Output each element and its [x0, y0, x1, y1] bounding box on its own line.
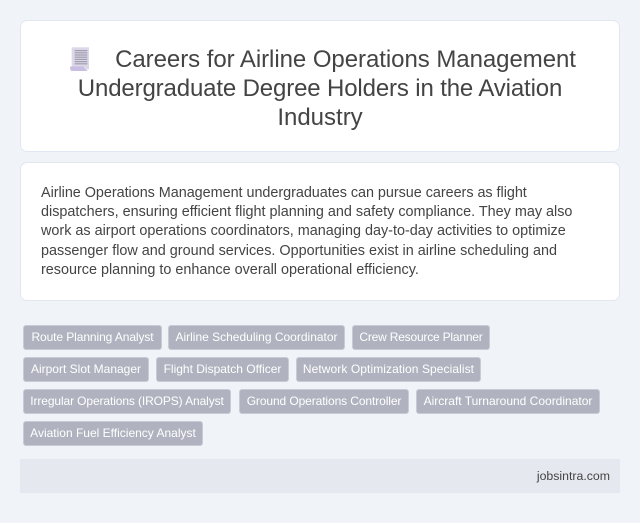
title: Industry	[277, 104, 363, 130]
description text	[41, 185, 572, 278]
tag: Airport Slot Manager	[31, 362, 141, 376]
tag	[168, 325, 345, 350]
title	[78, 46, 576, 130]
description text: work as airport operations coordinators, managing day-to-day activities to optimize	[41, 223, 566, 239]
title: Undergraduate Degree Holders in the Aviation	[78, 74, 562, 102]
tag	[239, 389, 409, 414]
panel: description card	[20, 162, 620, 301]
footer text: jobsintra.com	[537, 469, 610, 483]
tag	[156, 357, 289, 382]
description text: resource planning to enhance overall operational efficiency.	[41, 262, 419, 278]
description text: passenger flow and ground services. Opportunities exist in airline scheduling and	[41, 243, 557, 259]
title: Careers for Airline Operations Management	[115, 46, 576, 72]
footer bar	[20, 459, 620, 493]
tag: Flight Dispatch Officer	[164, 362, 281, 376]
description text: dispatchers, ensuring efficient flight planning and safety compliance. They may also	[41, 204, 572, 220]
panel: title card	[20, 20, 620, 152]
tag: Aviation Fuel Efficiency Analyst	[30, 426, 196, 440]
tag	[352, 325, 490, 350]
tag: Route Planning Analyst	[31, 330, 154, 344]
description text: Airline Operations Management undergraduates can pursue careers as flight	[41, 185, 527, 201]
tag	[23, 389, 231, 414]
tag: Irregular Operations (IROPS) Analyst	[30, 394, 224, 408]
tag: Ground Operations Controller	[247, 394, 401, 408]
tag	[416, 389, 600, 414]
tag	[296, 357, 481, 382]
panel: career tags	[23, 325, 600, 446]
tag	[23, 325, 162, 350]
icon: document scroll	[70, 47, 89, 71]
tag	[23, 357, 149, 382]
tag	[23, 421, 203, 446]
tag: Crew Resource Planner	[359, 330, 483, 344]
tag: Airline Scheduling Coordinator	[175, 330, 338, 344]
tag: Aircraft Turnaround Coordinator	[424, 394, 592, 408]
tag: Network Optimization Specialist	[303, 362, 474, 376]
